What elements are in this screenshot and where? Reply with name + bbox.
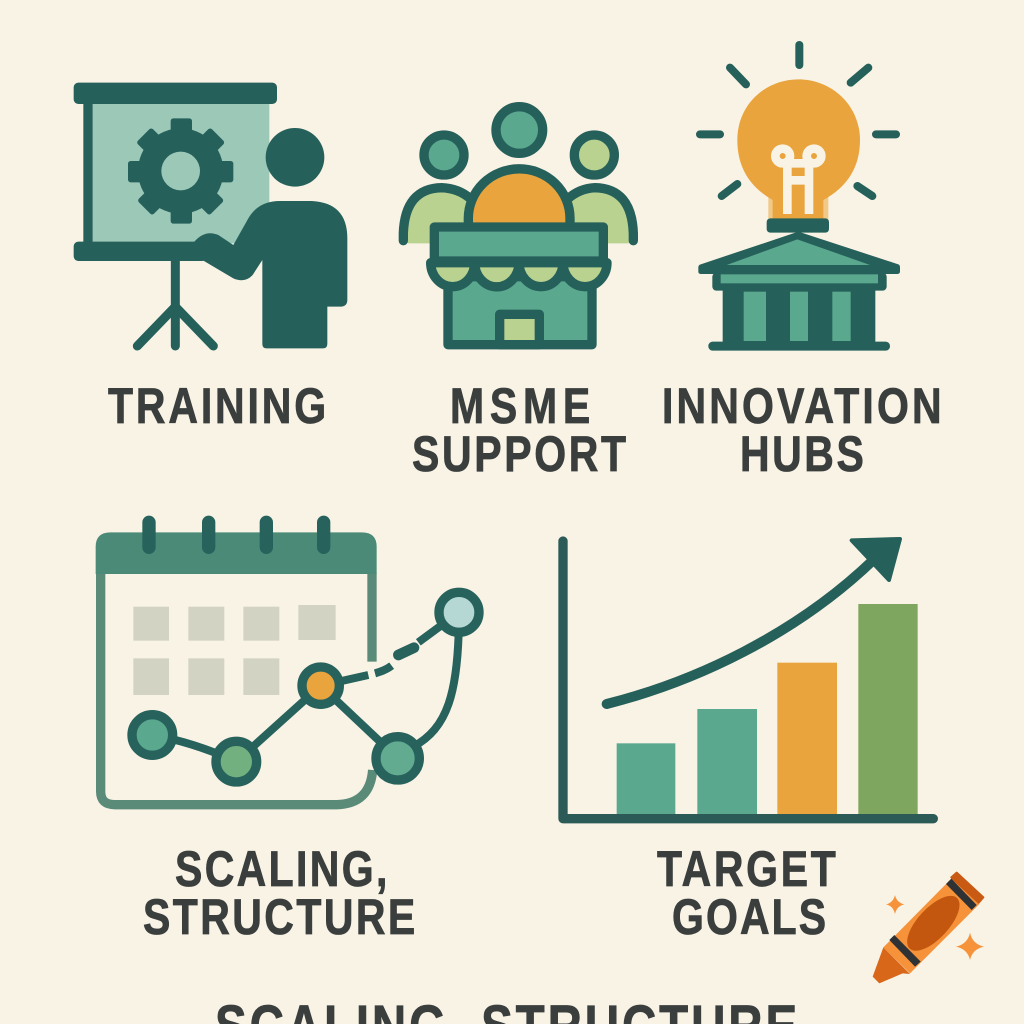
icon: crayon with sparkles: [873, 873, 984, 983]
label: target goals: TARGET: [657, 841, 836, 897]
storefront: [431, 227, 607, 345]
people group: [403, 107, 633, 243]
calendar: [96, 522, 377, 805]
chart: rising bars with arrow: [563, 539, 933, 819]
label: target goals: [657, 841, 836, 945]
growth arrow: [607, 539, 900, 704]
crayon: [873, 873, 983, 983]
presenter figure: [187, 128, 347, 348]
axes: [563, 541, 933, 819]
institution building: [698, 218, 900, 351]
calendar date cells: [133, 605, 336, 695]
label: training: TRAINING: [108, 378, 326, 434]
label: innovation hubs: HUBS: [740, 426, 864, 482]
icon: innovation hub bulb on building: [698, 45, 900, 351]
icon: training presenter at projector screen: [74, 83, 347, 348]
milestone path connectors: [152, 612, 459, 762]
projector screen: [74, 83, 277, 261]
label: innovation hubs: [662, 378, 942, 482]
tripod stand: [137, 258, 213, 346]
icon: calendar with scaling path: [96, 522, 479, 805]
label: innovation hubs: INNOVATION: [662, 378, 942, 434]
label: scaling, structure: SCALING,: [175, 841, 387, 897]
label: MSME support: MSME: [450, 378, 590, 434]
label: target goals: GOALS: [672, 889, 826, 945]
icon: gear: [128, 118, 233, 224]
label: scaling, structure: [143, 841, 415, 945]
label: MSME support: SUPPORT: [412, 426, 626, 482]
label: scaling, structure: STRUCTURE: [143, 889, 415, 945]
sparkles: [886, 895, 984, 960]
light bulb: [737, 79, 860, 220]
bars: [617, 604, 918, 815]
label: MSME support: [412, 378, 626, 482]
milestone nodes: [132, 592, 479, 782]
icon: MSME support people and storefront: [403, 107, 633, 345]
light rays: [700, 45, 896, 196]
